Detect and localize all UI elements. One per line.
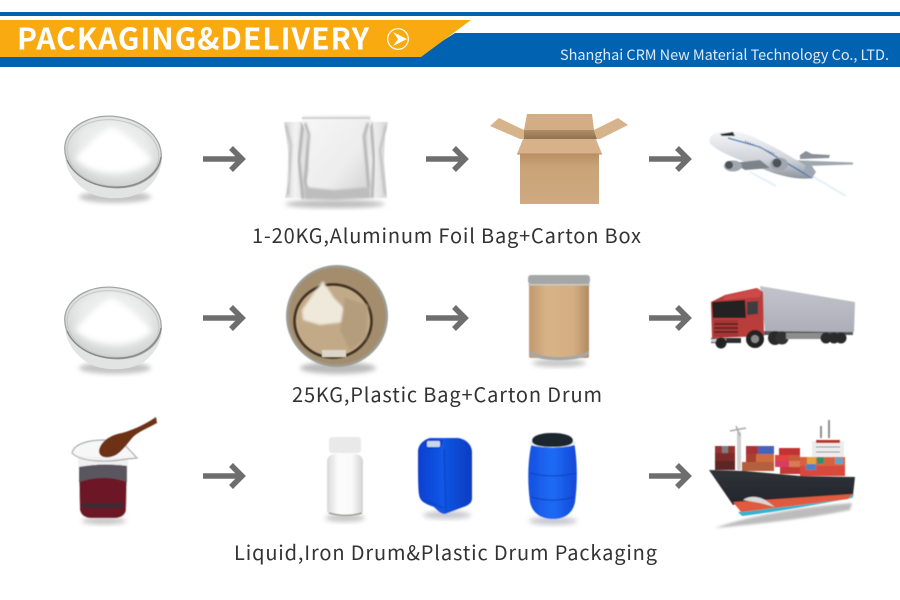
arrow: [426, 148, 465, 170]
title: PACKAGING&DELIVERY: [17, 14, 370, 58]
icon: truck: [711, 286, 855, 348]
caption: 25KG,Plastic Bag+Carton Drum: [292, 379, 602, 408]
arrow: [203, 307, 242, 329]
icon: blue jerry can: [418, 438, 472, 519]
arrow: [649, 148, 688, 170]
header banner: [0, 12, 900, 67]
arrow: [203, 465, 242, 487]
top blue rule: [0, 12, 900, 16]
icon: open drum with plastic bag: [286, 265, 388, 374]
arrow: [426, 307, 465, 329]
icon: blue barrel: [528, 433, 577, 525]
icon: powder dish: [60, 110, 166, 203]
orange title tab: [0, 20, 471, 57]
row 2: plastic bag and carton drum: [60, 265, 855, 408]
company name: Shanghai CRM New Material Technology Co., LTD.: [560, 44, 889, 65]
icon: airplane: [710, 132, 853, 196]
icon: foil bags: [284, 115, 388, 208]
arrow: [203, 148, 242, 170]
arrow: [649, 465, 688, 487]
row 1: aluminum foil bag and carton box: [60, 110, 853, 249]
caption: Liquid,Iron Drum&Plastic Drum Packaging: [234, 537, 657, 566]
icon: beaker with spoon: [72, 417, 157, 524]
icon: white bottle: [325, 437, 365, 522]
row 3: liquid packaging: [72, 417, 855, 566]
blue band: [0, 33, 900, 67]
icon: container ship: [709, 420, 855, 528]
icon: powder dish: [60, 281, 166, 374]
arrow: [649, 307, 688, 329]
icon: circled arrow: [388, 29, 408, 49]
icon: open carton box: [490, 114, 628, 204]
icon: carton drum: [528, 275, 590, 367]
caption: 1-20KG,Aluminum Foil Bag+Carton Box: [252, 220, 641, 249]
